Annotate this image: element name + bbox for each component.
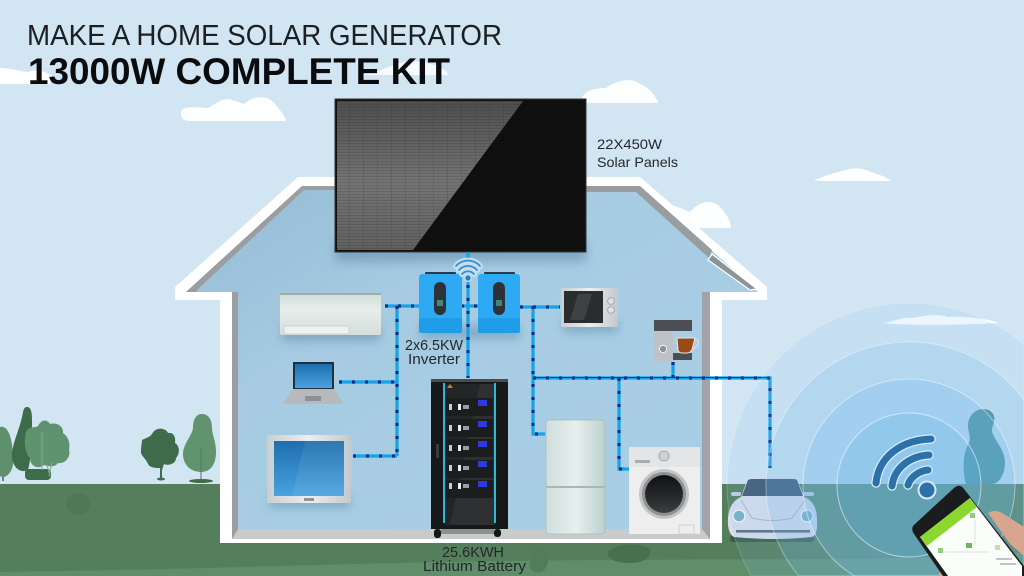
battery modules <box>446 398 493 498</box>
icon: large wifi <box>876 439 936 498</box>
trees left <box>0 407 216 483</box>
appliance soft shadows <box>270 240 617 507</box>
inverter label: 2x6.5KW <box>405 338 463 354</box>
air conditioner <box>280 293 381 335</box>
tree right <box>964 409 1005 484</box>
microwave <box>561 288 618 327</box>
conduit wiring <box>339 252 770 469</box>
laptop <box>284 362 342 404</box>
inverter right <box>478 272 520 333</box>
solar panel label: 22X450W <box>597 136 663 152</box>
washing machine <box>629 447 700 534</box>
inverter label: Inverter <box>408 352 460 368</box>
smartphone in hand <box>912 486 1024 576</box>
icon: small wifi <box>456 261 480 282</box>
subtitle: 13000W COMPLETE KIT <box>28 51 450 92</box>
inverter left <box>419 272 462 333</box>
house <box>175 177 767 543</box>
title: MAKE A HOME SOLAR GENERATOR <box>27 20 502 52</box>
coffee machine <box>654 320 698 361</box>
ground <box>0 484 1024 576</box>
battery rack <box>431 379 508 538</box>
car <box>728 477 817 542</box>
battery label: Lithium Battery <box>423 559 527 575</box>
monitor <box>267 435 351 503</box>
battery label: 25.6KWH <box>442 545 504 561</box>
refrigerator <box>546 420 605 534</box>
solar panel label: Solar Panels <box>597 154 678 170</box>
clouds <box>0 61 999 325</box>
wifi signal rings <box>727 303 1024 576</box>
solar panel <box>335 99 586 252</box>
